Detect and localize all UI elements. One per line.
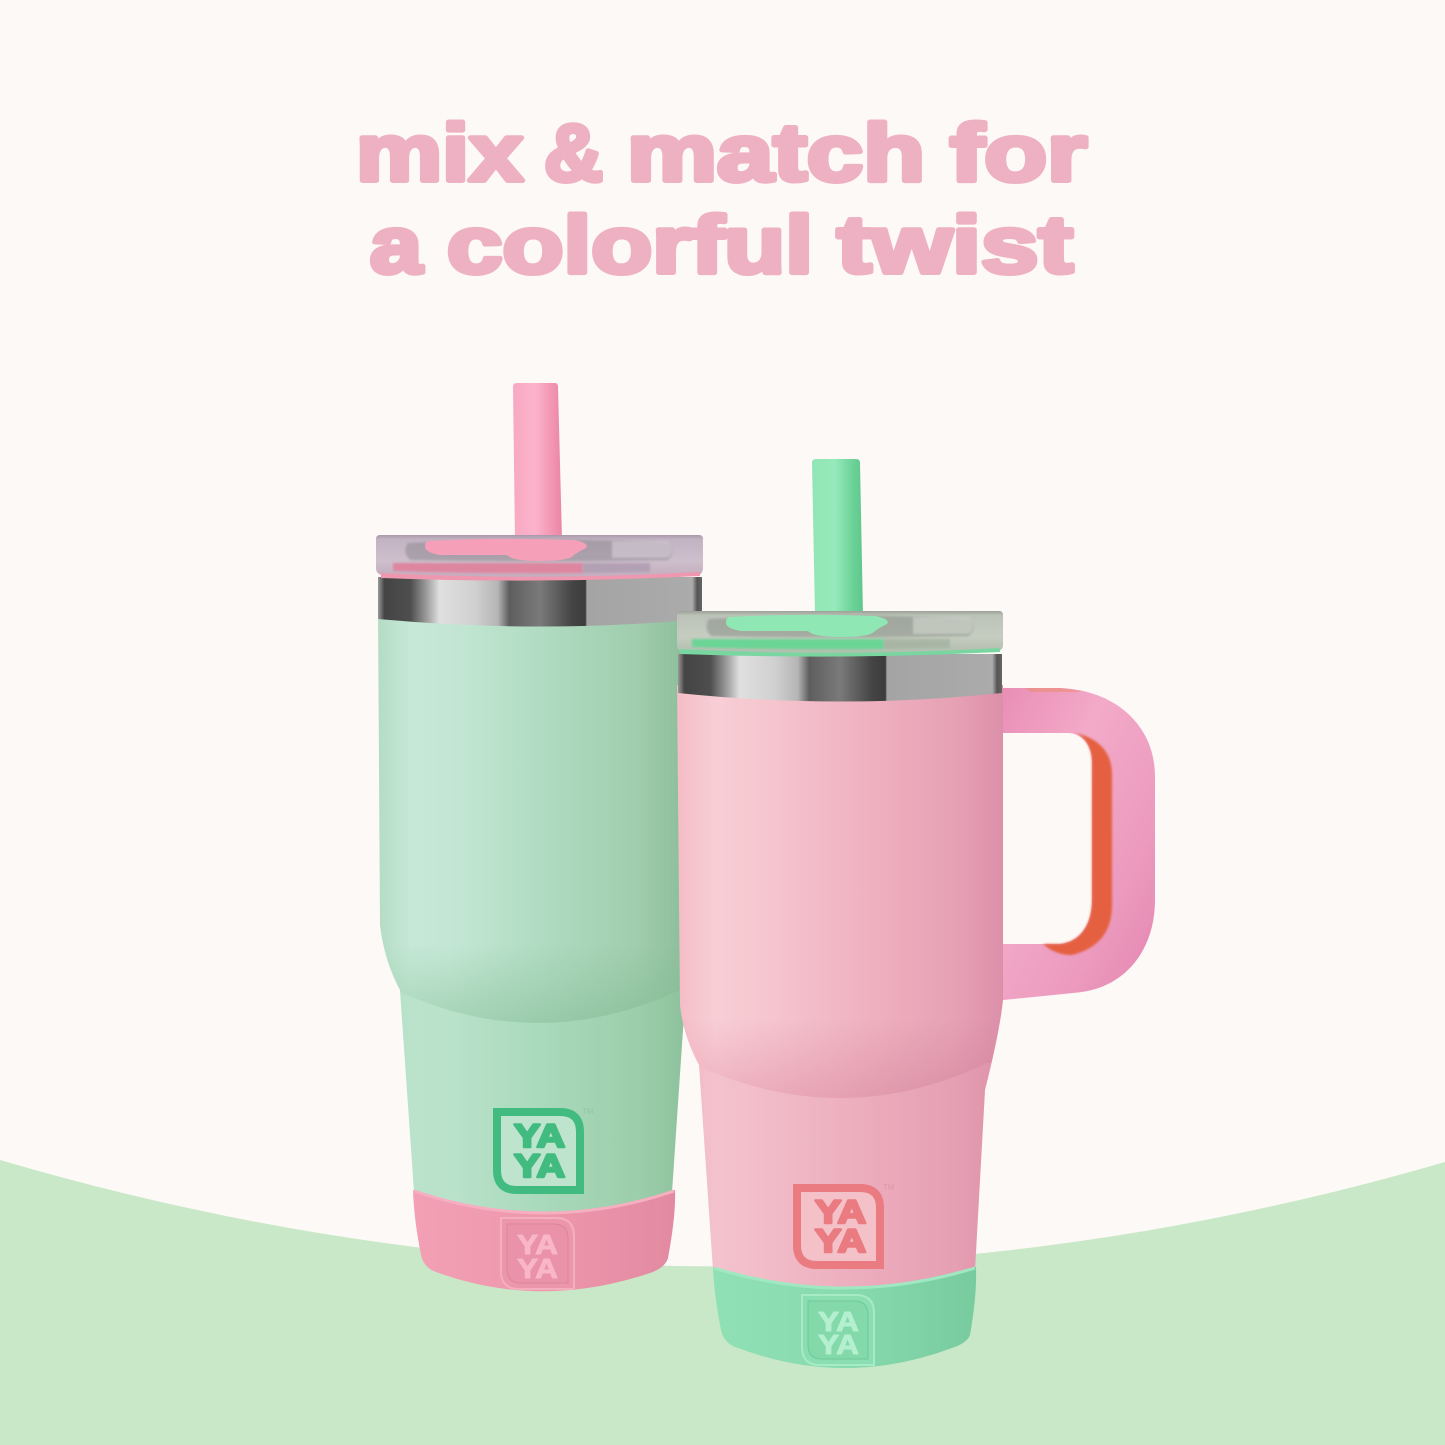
- handle: [1000, 688, 1155, 1000]
- title: [356, 108, 1087, 290]
- logo: TM: [883, 1183, 895, 1192]
- title: twist: [837, 200, 1073, 290]
- title: &: [544, 108, 603, 198]
- pink silicone band: YA: [517, 1229, 558, 1260]
- background green curve: [0, 1160, 1445, 1445]
- shoulder shade: [391, 964, 662, 1023]
- green straw: [812, 459, 863, 615]
- mug body: [677, 685, 1003, 1295]
- green silicone band: [713, 1267, 976, 1368]
- pink silicone band: [413, 1190, 675, 1291]
- lid: [677, 611, 1003, 657]
- lid: [376, 535, 703, 581]
- title: mix: [356, 108, 523, 198]
- steel rim: [378, 577, 702, 626]
- steel rim: [678, 654, 1002, 702]
- title: a: [370, 200, 423, 290]
- logo: TM: [582, 1107, 594, 1116]
- title: colorful: [447, 200, 813, 290]
- green silicone band: YA: [818, 1329, 859, 1360]
- logo: YA: [514, 1148, 565, 1184]
- green tumbler with pink straw: [376, 383, 703, 1291]
- lower section tint: [400, 992, 499, 1208]
- logo: YA: [815, 1223, 866, 1259]
- logo: [797, 1183, 895, 1265]
- tumbler body: [378, 610, 702, 1216]
- pink straw: [513, 383, 562, 540]
- pink mug with green straw: [677, 459, 1155, 1368]
- pink silicone band: YA: [517, 1253, 558, 1284]
- shoulder shade: [692, 1040, 996, 1098]
- logo: YA: [514, 1118, 565, 1154]
- title: for: [950, 108, 1087, 198]
- title: match: [627, 108, 925, 198]
- logo: YA: [815, 1194, 866, 1230]
- green silicone band: YA: [818, 1306, 859, 1337]
- lower section tint: [699, 1067, 794, 1283]
- logo: [497, 1107, 594, 1190]
